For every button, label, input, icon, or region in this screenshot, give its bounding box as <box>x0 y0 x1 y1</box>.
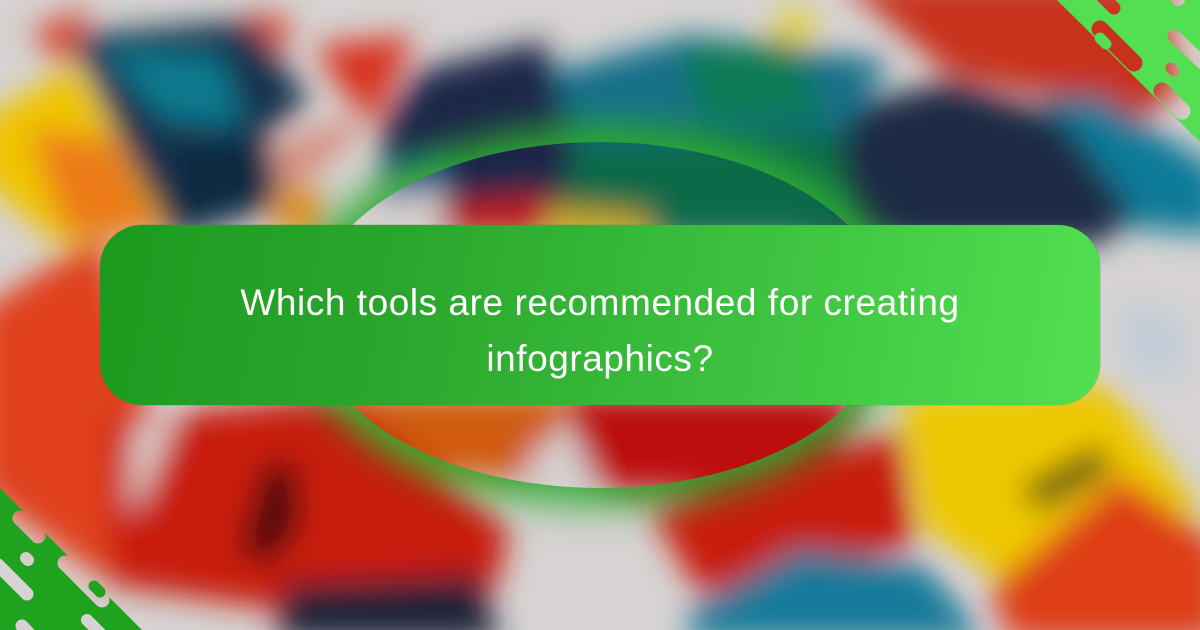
title banner <box>100 225 1100 405</box>
title text: infographics? <box>486 338 714 379</box>
corner decoration: bottom left <box>0 488 142 630</box>
bottom right <box>900 385 1200 585</box>
top left <box>70 20 310 240</box>
title text: Which tools are recommended for creating <box>240 282 960 323</box>
centre bottom <box>340 395 570 480</box>
corner decoration: top right <box>1057 0 1200 142</box>
top band <box>840 0 1180 120</box>
title text <box>240 282 960 379</box>
glowing green oval <box>310 142 890 488</box>
left and bottom left <box>0 235 150 590</box>
